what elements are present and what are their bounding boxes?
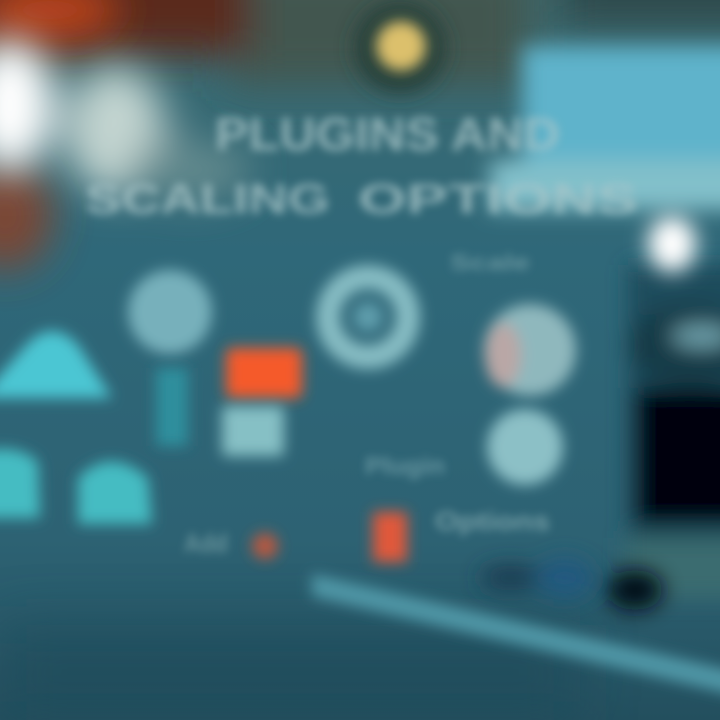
top band bbox=[0, 0, 720, 85]
text block: right small: Options bbox=[435, 506, 550, 536]
icon: cloud bbox=[0, 331, 112, 398]
icon: small orange dot bbox=[252, 533, 278, 559]
text block: centre small: Plugin bbox=[365, 453, 445, 480]
icon: circle upper left bbox=[128, 270, 212, 354]
icon: left small house bbox=[0, 449, 40, 518]
icon: teal column bbox=[156, 368, 188, 446]
icon: orange box bbox=[226, 348, 302, 398]
slanted light bar bbox=[312, 574, 720, 701]
title: PLUGINS AND bbox=[215, 108, 560, 160]
text block: upper right small: Scale bbox=[450, 250, 530, 275]
icon: pale box bbox=[222, 406, 284, 456]
glow: red-orange corner bbox=[0, 0, 120, 270]
glow: white lights on left bbox=[0, 39, 250, 200]
icon: orange small bar bbox=[373, 512, 407, 562]
panel: right dark block bbox=[625, 265, 720, 598]
icon: ring centre bbox=[328, 277, 408, 357]
glow: bright spot bbox=[648, 216, 696, 272]
panel: top-right light blue bbox=[490, 46, 720, 210]
text block: left small: Add bbox=[184, 528, 228, 558]
icon: right small house bbox=[78, 462, 152, 524]
title bbox=[85, 108, 638, 222]
icon: yellow lamp bbox=[356, 4, 444, 92]
icon: dark buttons row bbox=[480, 558, 663, 610]
title: SCALING bbox=[85, 175, 330, 222]
icon: pale circle lower right bbox=[487, 409, 563, 485]
icon: pinkish circle right bbox=[484, 304, 576, 396]
title: OPTIONS bbox=[358, 175, 638, 222]
bottom shade bbox=[0, 625, 580, 720]
